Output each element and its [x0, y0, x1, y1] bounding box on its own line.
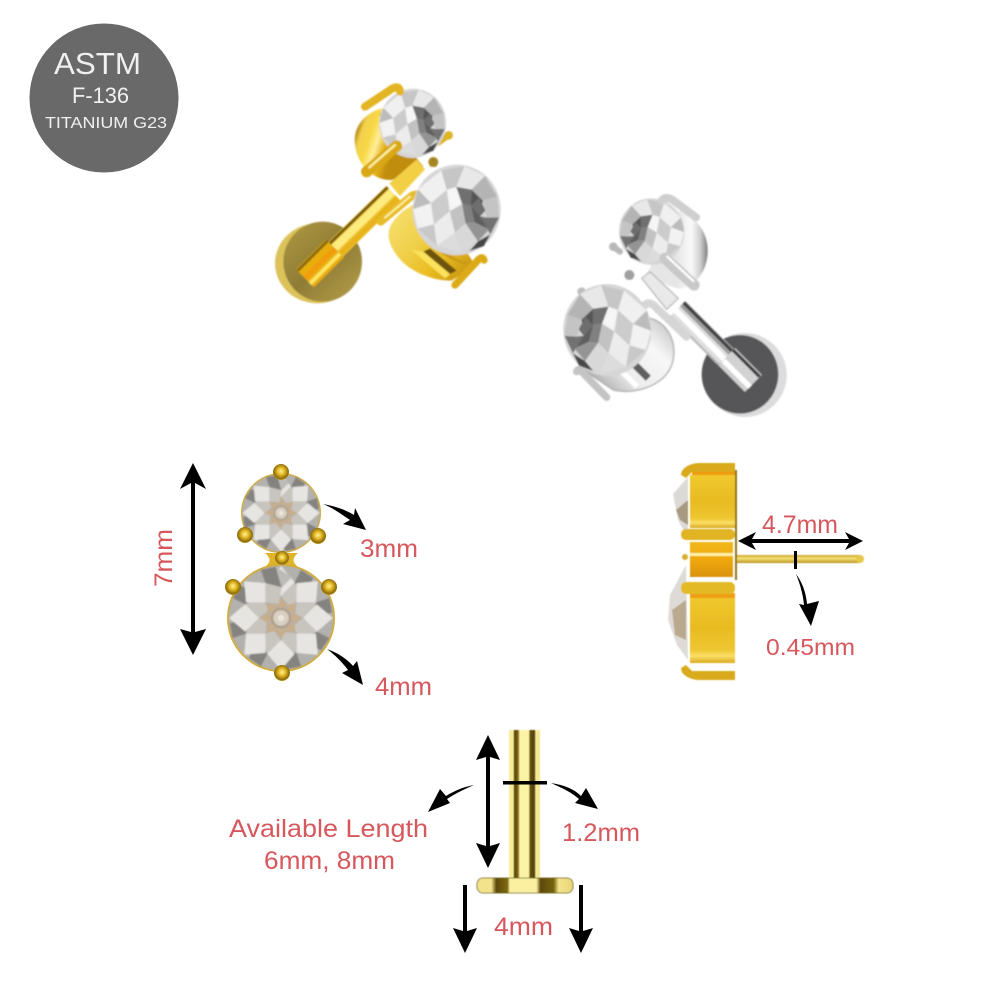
- tick: post diameter: [503, 781, 547, 784]
- photo: gold stud side view: [668, 463, 864, 680]
- label: 3mm: 3mm: [360, 535, 418, 563]
- arrow: base width left: [453, 885, 477, 953]
- label: 1.2mm: 1.2mm: [562, 819, 640, 847]
- photo: gold stud perspective view: [275, 83, 508, 303]
- label: available length: [229, 815, 428, 875]
- arrow: 7mm height: [180, 463, 206, 655]
- badge: ASTM F-136 Titanium G23: ASTM: [54, 46, 141, 81]
- label: 7mm: 7mm: [150, 529, 178, 587]
- label: available length: 6mm, 8mm: [264, 847, 395, 875]
- arrow: available length pointer: [428, 785, 474, 812]
- label: 4.7mm: 4.7mm: [762, 511, 838, 539]
- label: 4mm stone: 4mm: [375, 673, 432, 701]
- label: 4mm base: 4mm: [494, 913, 553, 941]
- photo: gold stud front view with stones: [218, 464, 344, 681]
- label: available length: Available Length: [229, 815, 428, 843]
- arrow: 4.7mm post length: [738, 532, 863, 550]
- badge: ASTM F-136 Titanium G23: F-136: [72, 83, 129, 108]
- arrow: 0.45mm pointer: [796, 574, 819, 626]
- arrow: 1.2mm pointer: [551, 783, 598, 809]
- arrow: base width right: [569, 885, 593, 953]
- badge: ASTM F-136 Titanium G23: [30, 24, 178, 172]
- tick: post thickness: [794, 551, 797, 569]
- arrow: 4mm stone pointer: [327, 649, 363, 685]
- arrow: post available length: [476, 735, 500, 868]
- photo: gold threadless post: [477, 730, 573, 893]
- label: 0.45mm: 0.45mm: [766, 634, 855, 660]
- photo: silver stud perspective view: [557, 194, 787, 417]
- arrow: 3mm stone pointer: [323, 504, 366, 530]
- badge: ASTM F-136 Titanium G23: TITANIUM G23: [45, 115, 167, 132]
